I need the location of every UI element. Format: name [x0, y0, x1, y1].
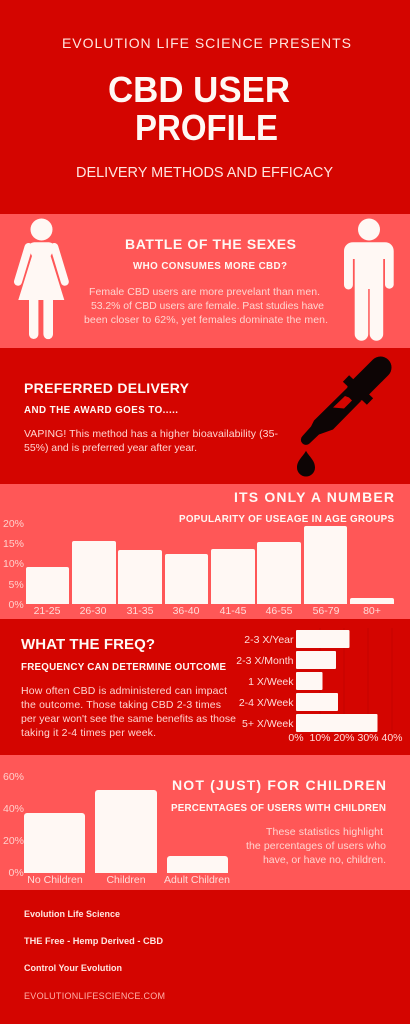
y axis labels: 10%	[3, 558, 24, 570]
heading: NOT (JUST) FOR CHILDREN	[172, 777, 386, 793]
body text: per year won't see the same benefits as those	[21, 713, 236, 725]
body text: Female CBD users are more prevelant than men.	[89, 286, 320, 298]
y axis labels: 5%	[8, 579, 24, 591]
subtitle: DELIVERY METHODS AND EFFICACY	[76, 165, 333, 181]
title	[108, 69, 290, 148]
heading: BATTLE OF THE SEXES	[125, 236, 296, 252]
category labels: 5+ X/Week	[242, 718, 294, 730]
footer lines: Evolution Life Science	[24, 909, 120, 920]
body text: taking it 2-4 times per week.	[21, 727, 156, 739]
body text: VAPING! This method has a higher bioavailability (35-	[24, 428, 278, 440]
x axis labels	[34, 605, 381, 617]
body text	[24, 428, 278, 454]
heading: WHAT THE FREQ?	[21, 636, 155, 653]
panel: frequency	[0, 619, 410, 755]
category labels: 2-3 X/Month	[236, 655, 294, 667]
panel: age groups	[0, 484, 410, 619]
body text: have, or have no, children.	[263, 854, 386, 866]
body text: These statistics highlight	[266, 826, 383, 838]
body text	[21, 685, 236, 739]
footer lines: THE Free - Hemp Derived - CBD	[24, 936, 163, 947]
y axis labels: 20%	[3, 518, 24, 530]
panel: children	[0, 755, 410, 890]
title: PROFILE	[135, 107, 278, 148]
header	[62, 35, 351, 181]
body text	[84, 286, 328, 326]
x axis labels	[27, 874, 230, 886]
icon: dropper	[297, 368, 380, 477]
subheading: WHO CONSUMES MORE CBD?	[133, 261, 287, 272]
x axis labels: Children	[106, 874, 146, 886]
panel: battle of the sexes	[0, 214, 410, 348]
subheading: FREQUENCY CAN DETERMINE OUTCOME	[21, 662, 226, 673]
y axis labels: 60%	[3, 771, 24, 783]
website: EVOLUTIONLIFESCIENCE.COM	[24, 991, 165, 1001]
body text: 53.2% of CBD users are female. Past studies have	[91, 300, 324, 312]
header eyebrow: EVOLUTION LIFE SCIENCE PRESENTS	[62, 35, 351, 51]
y axis labels: 0%	[8, 867, 24, 879]
y axis labels: 20%	[3, 835, 24, 847]
heading: PREFERRED DELIVERY	[24, 380, 190, 396]
title: CBD USER	[108, 69, 290, 110]
subheading: PERCENTAGES OF USERS WITH CHILDREN	[171, 803, 386, 814]
bar chart: children	[24, 790, 228, 873]
category labels: 2-4 X/Week	[239, 697, 294, 709]
body text: 55%) and is preferred year after year.	[24, 442, 197, 454]
category labels	[236, 634, 294, 730]
x axis labels: 36-40	[173, 605, 200, 617]
bar chart: frequency	[236, 628, 403, 744]
body text: the percentages of users who	[246, 840, 386, 852]
icon: female figure	[18, 218, 65, 339]
value axis labels: 20%	[333, 732, 355, 744]
value axis labels	[288, 732, 403, 744]
category labels: 1 X/Week	[248, 676, 294, 688]
body text: How often CBD is administered can impact	[21, 685, 227, 697]
y axis labels: 40%	[3, 803, 24, 815]
bars	[296, 630, 378, 732]
subheading: POPULARITY OF USEAGE IN AGE GROUPS	[179, 514, 394, 525]
panel: preferred delivery	[0, 349, 410, 484]
y axis labels	[3, 518, 24, 611]
subheading: AND THE AWARD GOES TO.....	[24, 405, 178, 416]
icon: male figure	[344, 218, 394, 341]
category labels: 2-3 X/Year	[244, 634, 294, 646]
x axis labels: No Children	[27, 874, 83, 886]
y axis labels: 15%	[3, 538, 24, 550]
value axis labels: 40%	[381, 732, 403, 744]
value axis labels: 0%	[288, 732, 304, 744]
value axis labels: 30%	[357, 732, 379, 744]
body text: been closer to 62%, yet females dominate the men.	[84, 314, 328, 326]
x axis labels: Adult Children	[164, 874, 230, 886]
footer lines: Control Your Evolution	[24, 963, 122, 974]
y axis labels	[3, 771, 24, 879]
footer	[24, 909, 165, 1001]
footer lines	[24, 909, 163, 974]
x axis labels: 21-25	[34, 605, 61, 617]
value axis labels: 10%	[309, 732, 331, 744]
body text	[246, 826, 386, 866]
x axis labels: 31-35	[127, 605, 154, 617]
x axis labels: 26-30	[80, 605, 107, 617]
x axis labels: 41-45	[220, 605, 247, 617]
bar chart: age groups	[26, 526, 394, 604]
y axis labels: 0%	[8, 599, 24, 611]
heading: ITS ONLY A NUMBER	[234, 489, 394, 505]
body text: the outcome. Those taking CBD 2-3 times	[21, 699, 221, 711]
x axis labels: 80+	[363, 605, 381, 617]
x axis labels: 46-55	[266, 605, 293, 617]
x axis labels: 56-79	[313, 605, 340, 617]
